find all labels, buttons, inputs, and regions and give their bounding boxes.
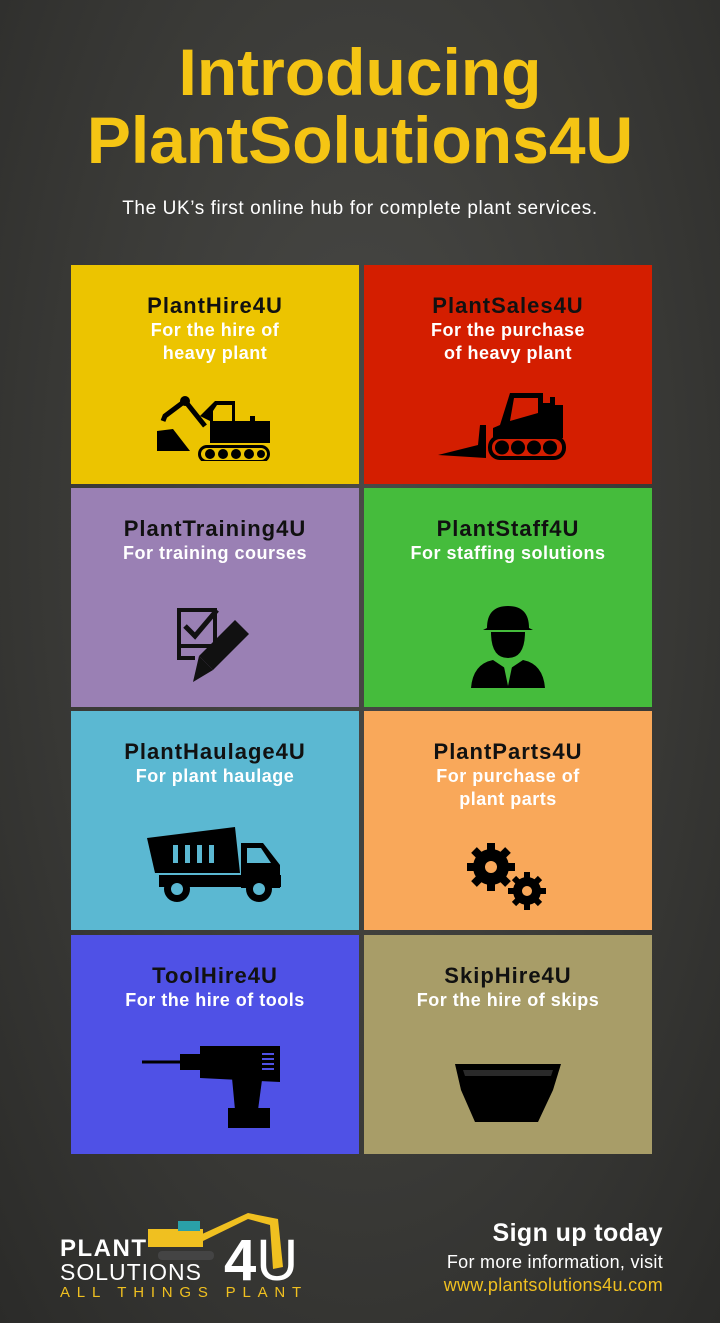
panel: PlantHaulage4U (71, 711, 359, 930)
title: Introducing (179, 35, 541, 109)
logo excavator (148, 1213, 283, 1269)
panel: PlantHire4U: For the hire of (151, 320, 279, 340)
title: PlantSolutions4U (87, 103, 633, 177)
panel: PlantStaff4U (364, 488, 652, 707)
sign up text: www.plantsolutions4u.com (444, 1275, 663, 1295)
panel: SkipHire4U: SkipHire4U (444, 963, 572, 988)
panel: SkipHire4U (364, 935, 652, 1154)
panel: PlantHire4U: heavy plant (163, 343, 267, 363)
logo (60, 1213, 308, 1301)
panel: PlantTraining4U: PlantTraining4U (124, 516, 306, 541)
panel: PlantStaff4U: For staffing solutions (410, 543, 606, 563)
panel: SkipHire4U: For the hire of skips (417, 990, 599, 1010)
icon: gears (467, 843, 546, 910)
icon: skip (455, 1064, 561, 1122)
icon: worker (471, 606, 545, 688)
panel: PlantSales4U: For the purchase (431, 320, 585, 340)
panel: PlantStaff4U: PlantStaff4U (437, 516, 579, 541)
panel: ToolHire4U: For the hire of tools (125, 990, 305, 1010)
subtitle: The UK’s first online hub for complete plant services. (122, 198, 598, 219)
panel: ToolHire4U (71, 935, 359, 1154)
panel: PlantHaulage4U: For plant haulage (136, 766, 294, 786)
panel: PlantHaulage4U: PlantHaulage4U (124, 739, 306, 764)
logo: ALL THINGS PLANT (60, 1284, 308, 1301)
logo: 4U (224, 1228, 298, 1293)
panel: PlantTraining4U: For training courses (123, 543, 307, 563)
panel: PlantHire4U (71, 265, 359, 484)
logo: SOLUTIONS (60, 1259, 202, 1285)
panel: PlantParts4U (364, 711, 652, 930)
panel: PlantSales4U: PlantSales4U (432, 293, 584, 318)
panel: PlantTraining4U (71, 488, 359, 707)
panel: PlantParts4U: For purchase of (436, 766, 580, 786)
sign up text (444, 1219, 663, 1295)
icon: bulldozer (438, 393, 566, 460)
sign up text: Sign up today (493, 1219, 663, 1247)
icon: excavator (157, 396, 270, 461)
logo text: PLANT (60, 1235, 148, 1262)
panel: PlantSales4U (364, 265, 652, 484)
icon: dump truck (147, 827, 281, 902)
panel: PlantParts4U: plant parts (459, 789, 557, 809)
panel: PlantHire4U: PlantHire4U (147, 293, 283, 318)
panel: ToolHire4U: ToolHire4U (152, 963, 278, 988)
title (87, 35, 633, 177)
icon: checklist pen (177, 608, 249, 682)
panel: PlantParts4U: PlantParts4U (434, 739, 582, 764)
icon: drill (142, 1046, 280, 1128)
panel: PlantSales4U: of heavy plant (444, 343, 572, 363)
sign up text: For more information, visit (447, 1252, 663, 1272)
